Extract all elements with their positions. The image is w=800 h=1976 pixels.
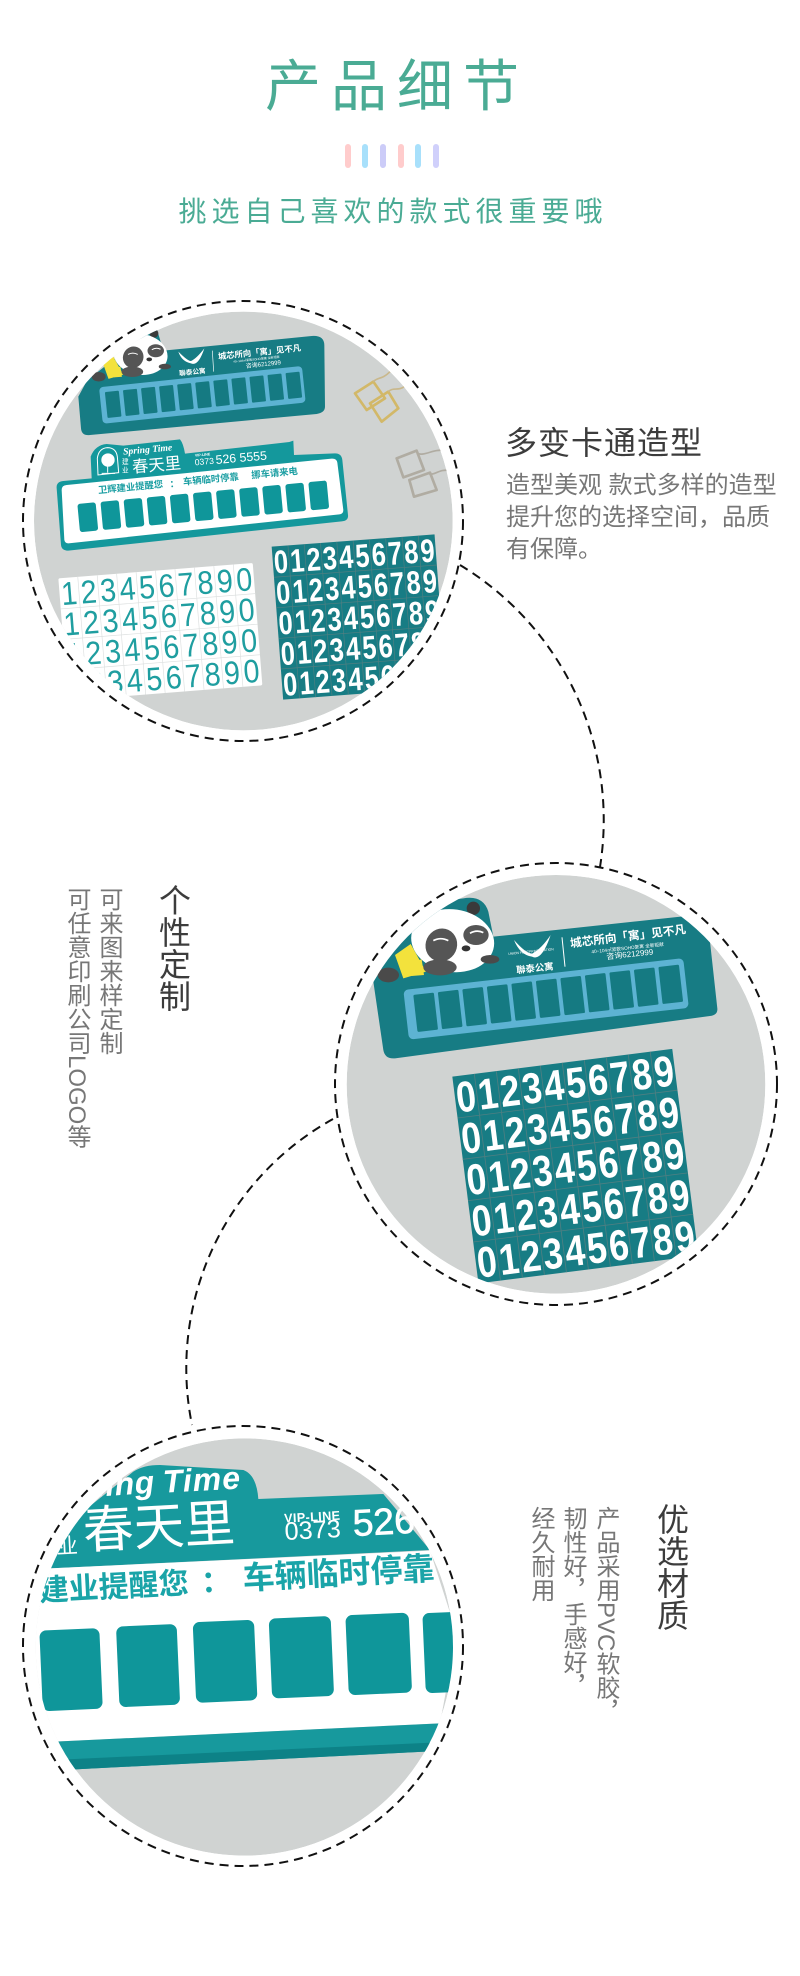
connector arc: circle 2 to circle 3 xyxy=(186,1119,333,1425)
connector arc: circle 1 to circle 2 xyxy=(460,565,604,867)
text: 韧性好，手感好: 韧性好，手感好， xyxy=(559,1506,586,1698)
white card with teal border: 车辆临时停靠 xyxy=(182,471,239,487)
panda card: 40~104㎡紧致SOHO复寓 全新钜献 xyxy=(591,941,664,955)
heading: 优选材质: 优选材质 xyxy=(653,1503,689,1631)
white panel with slots: 车辆临时停靠 xyxy=(242,1550,435,1596)
photo circle 2: panda card and digits xyxy=(335,863,777,1305)
digit sheet xyxy=(452,1047,699,1288)
dark teal card with panda: 聯泰公寓 xyxy=(179,366,206,378)
digit sheet: 0123456789 xyxy=(464,1130,687,1205)
digit sheet: 0123456789 xyxy=(453,1047,677,1122)
subtitle: 挑选自己喜欢的款式很重要哦 xyxy=(178,196,608,227)
gold binder clip xyxy=(355,372,405,422)
text: 经久耐用: 经久耐用 xyxy=(527,1506,554,1602)
white number sheet: 1234567890 xyxy=(67,652,261,704)
white card with teal border: VIP-LINE xyxy=(195,452,211,458)
panda card xyxy=(373,898,717,1058)
dark teal number sheet xyxy=(272,532,446,704)
photo circle 1: product set xyxy=(23,301,463,741)
dark teal card with panda: 城芯所向「寓」见不凡 xyxy=(217,343,302,361)
heading: 多变卡通造型: 多变卡通造型 xyxy=(505,425,703,461)
panda illustration xyxy=(378,902,499,982)
white card with teal border: 挪车请来电 xyxy=(251,465,299,480)
dark teal number sheet: 0123456789 xyxy=(275,563,438,612)
dark teal number sheet: 0123456789 xyxy=(279,624,443,673)
digit sheet: 0123456789 xyxy=(474,1212,698,1288)
teal header band: Time xyxy=(162,1460,241,1500)
panda card: UNION FOOTPRINT STATION xyxy=(508,947,554,956)
white panel with slots: 建业提醒您 xyxy=(38,1567,189,1608)
heading: 个性定制: 个性定制 xyxy=(155,884,191,1012)
digit sheet: 0123456789 xyxy=(469,1171,692,1246)
dark teal card with panda: 咨询6212999 xyxy=(245,358,282,370)
dark teal number sheet: 0123456789 xyxy=(277,594,441,642)
photo circle 3: material close-up xyxy=(23,1426,489,1866)
white number sheet: 1234567890 xyxy=(60,560,254,613)
teal header band: 春天里 xyxy=(82,1494,236,1559)
teal header band xyxy=(50,1460,430,1568)
teal header band: 0373 xyxy=(284,1515,342,1546)
decorative colored bars xyxy=(345,144,439,168)
panda card: 聯泰公寓 xyxy=(516,960,554,975)
dark teal card with panda xyxy=(78,328,325,435)
text: 产品采用PVC软胶: 产品采用PVC软胶， xyxy=(592,1506,619,1723)
white card with teal border: 卫辉建业提醒您 xyxy=(97,478,164,495)
panda card: 城芯所向「寓」见不凡 xyxy=(569,922,687,950)
white number sheet: 1234567890 xyxy=(65,622,258,674)
white card with teal border: 0373 xyxy=(194,456,215,467)
text block: style description: 提升您的选择空间，品质 xyxy=(506,504,770,531)
white card with teal border: 春天里 xyxy=(131,454,182,477)
teal lower edge xyxy=(55,1723,440,1769)
white card with teal border: Spring Time xyxy=(123,442,173,458)
white card with teal border xyxy=(57,439,348,551)
white number sheet xyxy=(58,560,263,704)
text: 可来图来样定制: 可来图来样定制 xyxy=(95,887,122,1055)
white card with teal border: 526 5555 xyxy=(215,449,268,467)
white number sheet: 1234567890 xyxy=(62,591,256,643)
teal header band: VIP-LINE xyxy=(284,1509,340,1526)
white card with teal border: ： xyxy=(169,478,179,489)
text block: style description: 造型美观 款式多样的造型 xyxy=(506,472,777,499)
teal header band: ling xyxy=(95,1464,155,1504)
title: 产品细节 xyxy=(265,55,529,118)
teal header band: 业 xyxy=(56,1533,79,1559)
digit sheet: 0123456789 xyxy=(458,1088,682,1164)
dark teal number sheet: 0123456789 xyxy=(282,655,445,704)
text block: style description xyxy=(506,472,777,563)
panda card: 咨询6212999 xyxy=(606,946,654,961)
white panel with slots: ： xyxy=(200,1565,232,1600)
teal header band: 526 xyxy=(352,1499,416,1544)
white card with teal border: 建 xyxy=(122,457,129,466)
silver binder clip xyxy=(397,450,448,497)
text block: style description: 有保障。 xyxy=(506,536,602,563)
white card with teal border: 业 xyxy=(122,466,129,475)
white panel with slots xyxy=(32,1550,489,1742)
dark teal number sheet: 0123456789 xyxy=(273,533,436,581)
text: 可任意印刷公司LOGO等: 可任意印刷公司LOGO等 xyxy=(63,887,90,1148)
dark teal card with panda: 40~104㎡紧致SOHO复寓 全新钜献 xyxy=(233,354,280,364)
